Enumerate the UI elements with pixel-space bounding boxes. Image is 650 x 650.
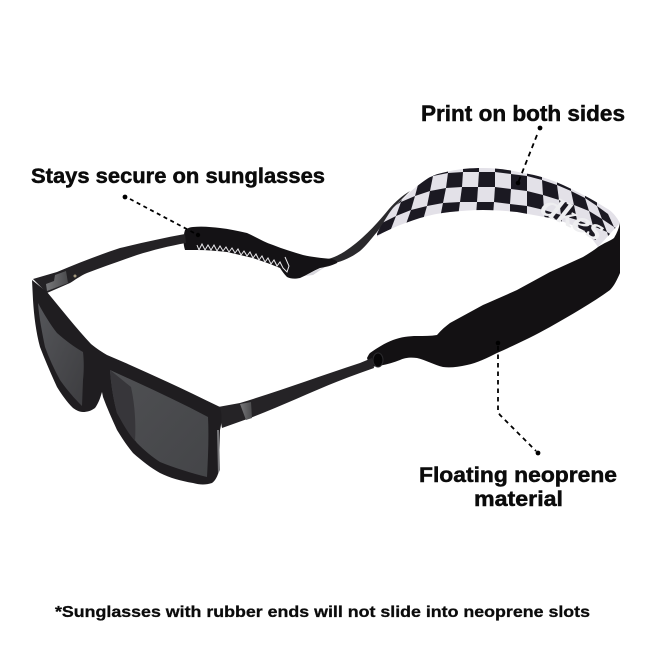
strap: twisted middle section xyxy=(328,191,410,264)
left lens xyxy=(38,303,84,406)
callout line: print on both sides xyxy=(516,126,542,185)
heading: floating neoprene material: material xyxy=(474,487,563,511)
lens reflection xyxy=(110,370,135,441)
strap: checkered inner band xyxy=(377,168,620,247)
strap: black neoprene outer band xyxy=(367,223,620,367)
strap slot knob xyxy=(373,353,383,367)
frame highlight xyxy=(217,430,220,474)
sunglasses xyxy=(32,234,383,484)
heading: floating neoprene material xyxy=(419,463,617,511)
right temple arm xyxy=(218,358,374,428)
right hinge xyxy=(240,402,252,420)
callout line: floating neoprene xyxy=(496,341,540,455)
heading: floating neoprene material: Floating neoprene xyxy=(419,463,617,487)
script logo on band: dkes xyxy=(536,189,610,247)
heading: stays secure on sunglasses: Stays secure on sunglasses xyxy=(31,164,325,188)
footnote: *Sunglasses with rubber ends will not slide into neoprene slots xyxy=(55,604,590,621)
left temple arm xyxy=(33,234,186,293)
frame xyxy=(32,280,222,484)
zigzag stitching xyxy=(197,244,289,272)
left hinge xyxy=(46,271,68,291)
right lens xyxy=(110,370,208,477)
callout line: stays secure xyxy=(123,195,200,237)
strap: left sleeve with stitching xyxy=(184,227,337,279)
heading: print on both sides: Print on both sides xyxy=(421,101,625,126)
